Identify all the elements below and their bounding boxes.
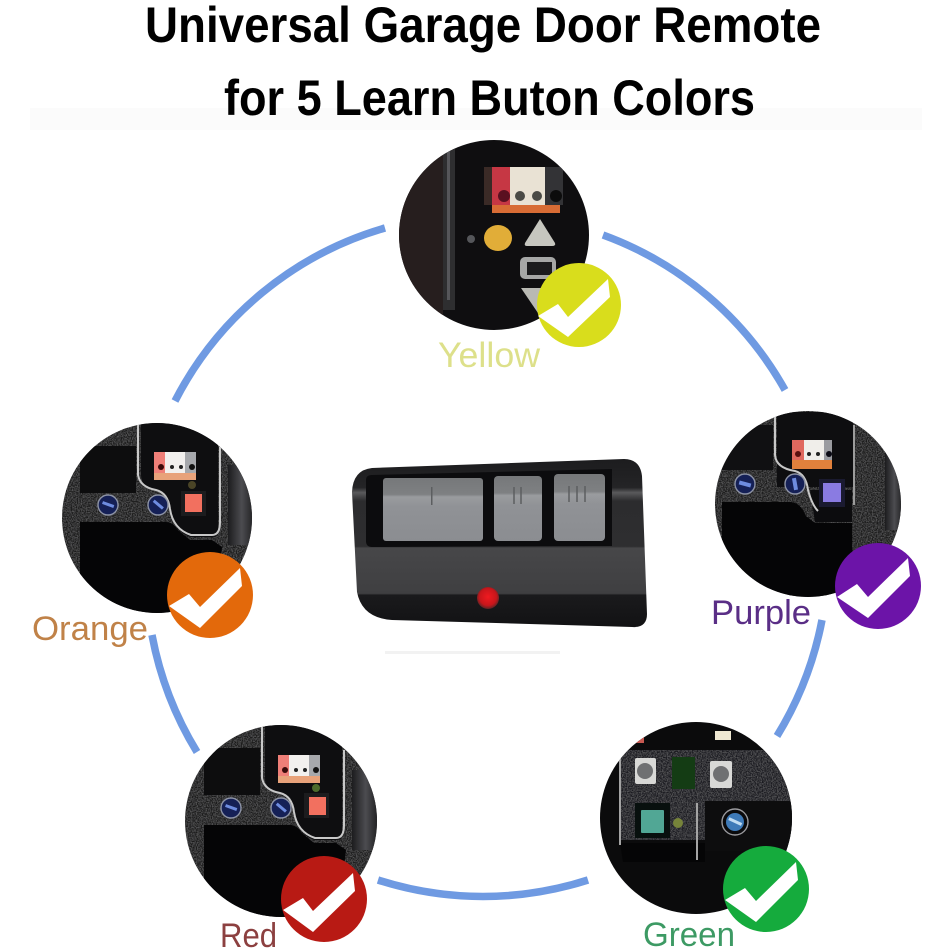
red check badge xyxy=(281,856,367,942)
remote shadow xyxy=(385,651,560,654)
green check badge xyxy=(723,846,809,932)
panel: red opener xyxy=(185,725,377,952)
connecting ring xyxy=(152,228,822,896)
purple check badge xyxy=(835,543,921,629)
panel: green opener xyxy=(599,722,809,952)
panel: orange opener xyxy=(32,423,253,648)
label: Yellow: Yellow xyxy=(438,336,541,375)
button well xyxy=(366,469,612,547)
button III xyxy=(554,474,605,541)
button I xyxy=(383,478,483,541)
remote body xyxy=(352,459,647,627)
orange opener photo xyxy=(62,423,253,614)
panel: purple opener xyxy=(711,411,921,632)
button II xyxy=(494,476,542,541)
LED indicator xyxy=(477,587,499,609)
yellow opener photo xyxy=(399,140,589,330)
red opener photo xyxy=(185,725,377,917)
remote control xyxy=(352,459,647,627)
panel: yellow opener xyxy=(399,140,621,375)
yellow check badge xyxy=(537,263,621,347)
title: for 5 Learn Buton Colors xyxy=(224,70,755,126)
background band xyxy=(30,108,922,130)
title xyxy=(145,0,821,126)
label: Orange: Orange xyxy=(32,610,148,648)
purple opener photo xyxy=(715,411,902,598)
green opener photo xyxy=(599,722,795,914)
label: Purple: Purple xyxy=(711,594,811,632)
orange check badge xyxy=(167,552,253,638)
